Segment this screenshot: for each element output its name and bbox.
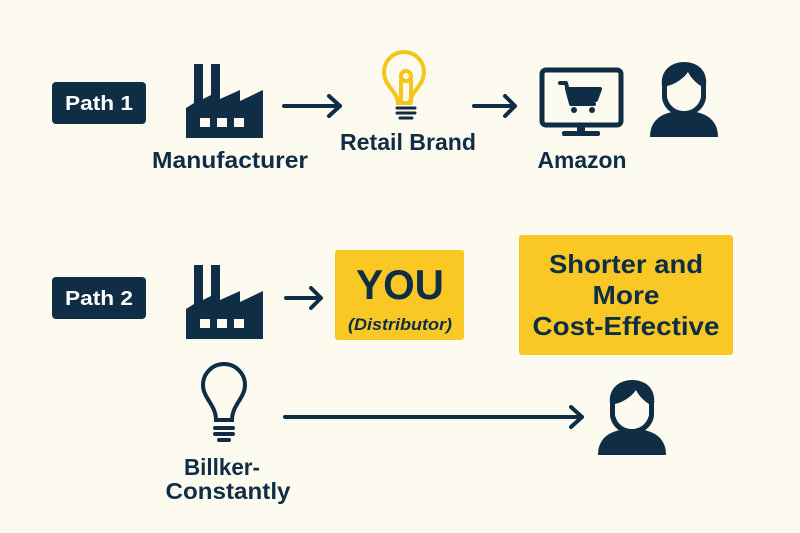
text: Billker-Constantly: Billker- — [184, 454, 260, 480]
box: YOU distributor: YOU — [356, 261, 444, 308]
callout: shorter and more cost-effective: Cost-Effective — [532, 311, 720, 341]
callout: shorter and more cost-effective: More — [592, 280, 660, 310]
text: Billker-Constantly: Constantly — [166, 478, 291, 504]
label: path 2: Path 2 — [65, 288, 133, 310]
arrow 3 — [286, 288, 321, 308]
icon: outline bulb — [203, 364, 245, 440]
long arrow — [285, 407, 582, 427]
arrow 1 — [284, 96, 340, 116]
callout: shorter and more cost-effective — [519, 235, 733, 355]
icon: person 1 — [650, 62, 718, 137]
icon: factory 2 — [186, 265, 263, 339]
callout: shorter and more cost-effective: Shorter and — [549, 249, 703, 279]
icon: yellow bulb — [384, 52, 424, 103]
icon: person 2 — [598, 380, 666, 455]
box: YOU distributor — [335, 250, 464, 340]
label: path 1 — [52, 82, 146, 124]
text: Billker-Constantly — [166, 454, 291, 504]
text: Retail Brand: Retail Brand — [340, 129, 476, 155]
label: path 2 — [52, 277, 146, 319]
text: Amazon: Amazon — [538, 147, 626, 173]
text: Manufacturer: Manufacturer — [152, 147, 308, 173]
icon: factory 1 — [186, 64, 263, 138]
box: YOU distributor: (Distributor) — [348, 315, 452, 334]
arrow 2 — [474, 96, 515, 116]
label: path 1: Path 1 — [65, 93, 133, 115]
icon: monitor with cart — [542, 70, 621, 136]
